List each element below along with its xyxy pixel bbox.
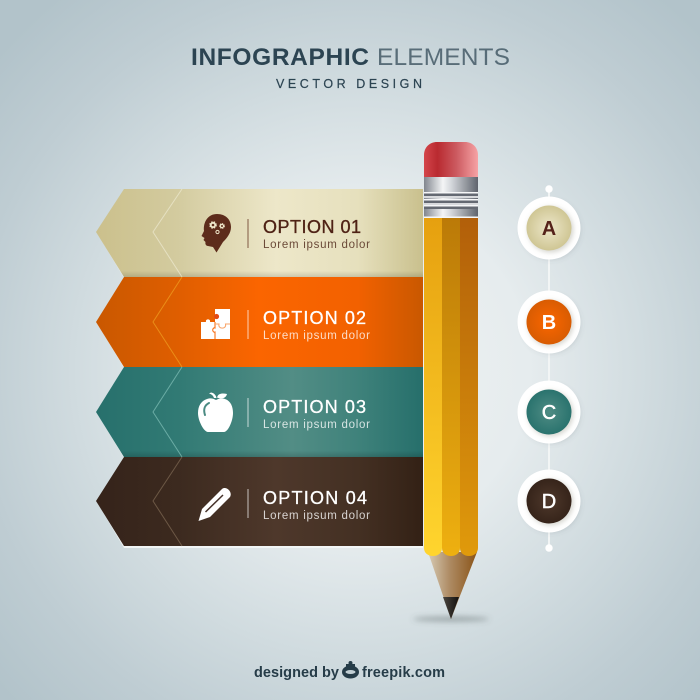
divider <box>248 489 249 518</box>
title: INFOGRAPHIC <box>191 44 369 71</box>
title <box>191 44 510 71</box>
subtitle: VECTOR DESIGN <box>276 77 422 91</box>
connector line <box>548 189 550 548</box>
pencil <box>424 142 478 619</box>
connector dot bottom <box>545 544 553 552</box>
title: ELEMENTS <box>377 44 510 71</box>
divider <box>248 398 249 427</box>
option 03 label: OPTION 03 <box>263 397 366 417</box>
badge D <box>518 470 581 533</box>
option 02 label: OPTION 02 <box>263 308 366 328</box>
badge B: B <box>542 312 556 334</box>
divider <box>248 310 249 339</box>
connector dot top <box>545 185 553 193</box>
footer credit: freepik.com <box>362 665 445 681</box>
footer credit <box>254 661 445 681</box>
pencil shadow <box>413 616 489 622</box>
option 01 label: Lorem ipsum dolor <box>263 239 370 251</box>
option 04 label <box>263 488 370 522</box>
option 04 label: Lorem ipsum dolor <box>263 510 370 522</box>
divider <box>248 219 249 248</box>
panel: option 03 <box>96 367 423 458</box>
pencil wood tip <box>428 552 477 619</box>
icon: puzzle <box>201 309 230 339</box>
badge B <box>518 290 581 354</box>
option 02 label <box>263 308 370 342</box>
badge D: D <box>542 491 556 513</box>
footer credit: designed by <box>254 665 339 681</box>
badge A <box>518 196 581 260</box>
option 03 label <box>263 397 370 431</box>
pencil body <box>424 218 478 556</box>
pencil ferrule <box>424 177 478 218</box>
panel: option 01 <box>96 189 423 278</box>
badge C: C <box>542 402 556 424</box>
icon: pencil <box>198 488 231 521</box>
panel: option 02 <box>96 277 423 368</box>
badge C <box>518 380 581 444</box>
icon: freepik logo <box>342 661 359 678</box>
pencil lead <box>443 597 459 619</box>
panel: option 04 <box>96 457 423 548</box>
option 01 label: OPTION 01 <box>263 217 361 237</box>
option 04 label: OPTION 04 <box>263 488 367 508</box>
option 02 label: Lorem ipsum dolor <box>263 330 370 342</box>
icon: apple <box>198 392 233 432</box>
badge A: A <box>542 218 556 240</box>
pencil eraser <box>424 142 478 177</box>
icon: head with gears <box>202 214 231 252</box>
option 01 label <box>263 217 370 251</box>
option 03 label: Lorem ipsum dolor <box>263 419 370 431</box>
